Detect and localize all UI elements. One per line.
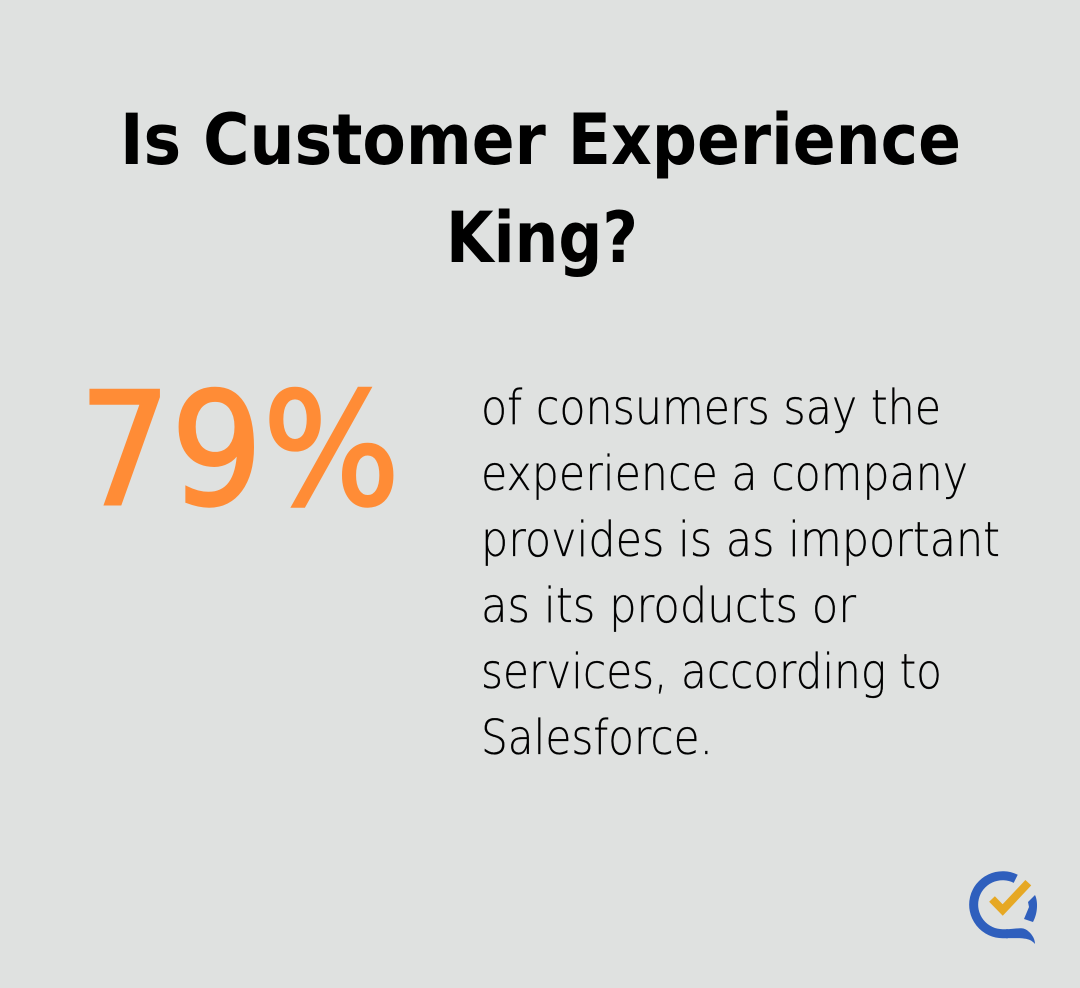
description text: Salesforce. [481,710,713,766]
description text: as its products or [481,578,856,634]
description text: of consumers say the [481,380,941,436]
statistic: 79%: 79% [79,359,400,541]
icon: logo speech bubble with check mark [974,876,1037,944]
title [120,99,961,279]
title: Is Customer Experience [120,99,961,181]
description text [481,380,1000,766]
description text: services, according to [481,644,942,700]
description text: provides is as important [481,512,1000,568]
description text: experience a company [481,446,968,502]
title: King? [446,197,638,279]
